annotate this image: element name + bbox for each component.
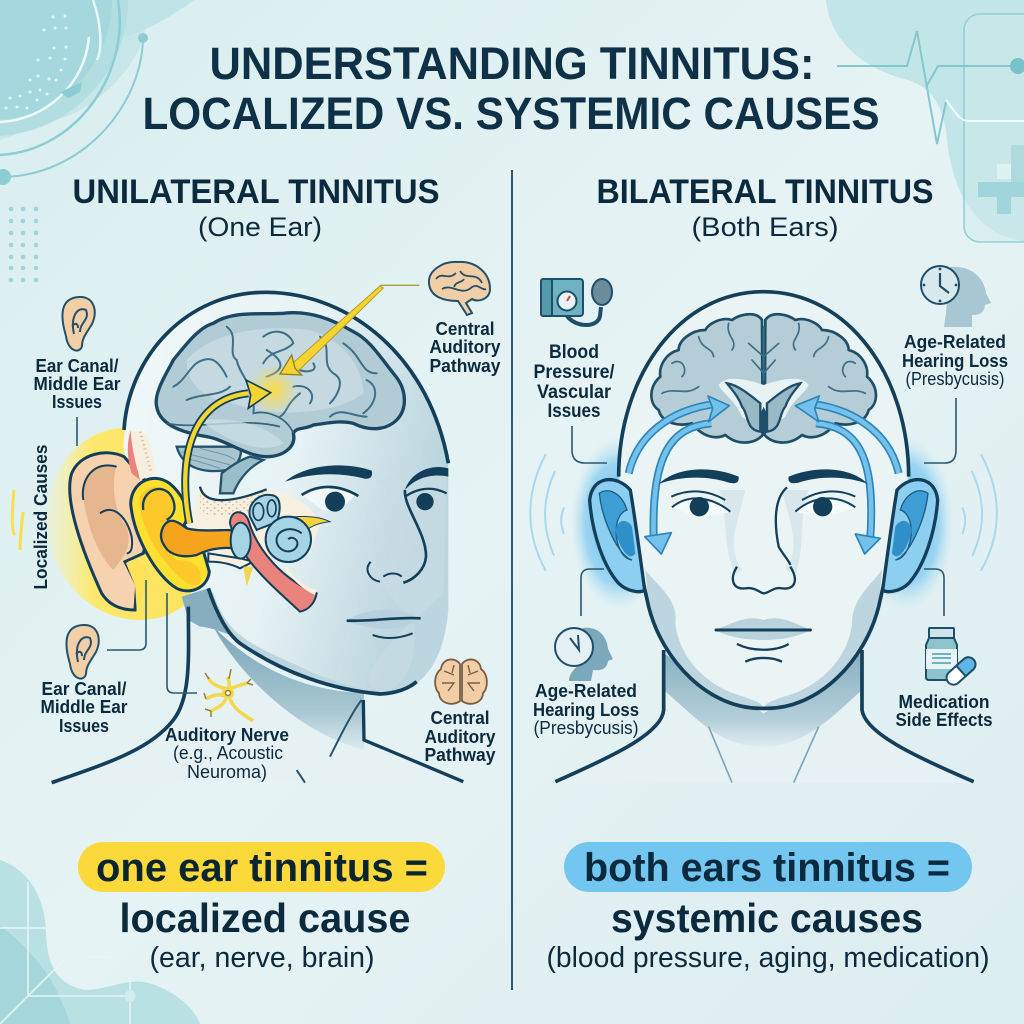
heading: unilateral: UNILATERAL TINNITUS [72,173,440,211]
callout line: auditory nerve [167,593,197,693]
sound waves [530,455,997,570]
icon: ear top [62,297,95,351]
icon: medicine bottle and capsule [926,628,978,688]
orange ear canal [161,521,233,556]
labels: left panel: Middle Ear [34,373,120,394]
decoration: bottom-left blobs [0,860,200,1024]
labels: right panel: Hearing Loss [533,699,639,720]
labels: right panel: Hearing Loss [902,350,1008,371]
icon: brain side [429,262,490,315]
blue pill [564,842,972,892]
labels: left panel: Issues [52,391,102,412]
blue arrows [629,396,899,554]
cross section: skull bone layer [128,430,320,587]
labels: left panel: Auditory [424,726,496,747]
head [123,292,448,694]
icon: brain top [435,659,487,704]
labels: left panel: Pathway [430,355,501,376]
callout line: age-related top [924,398,956,463]
ears [590,480,938,592]
center divider [511,170,513,990]
brain side view [156,313,404,493]
decoration: top-right ECG and medical panel [826,0,1024,242]
takeaway: one ear: one ear tinnitus = [96,846,428,890]
yellow inner ear [131,478,209,591]
labels: right panel: (Presbycusis) [906,369,1004,389]
heading: bilateral: (Both Ears) [692,212,838,242]
labels: right panel: Age-Related [904,331,1006,352]
labels: left panel: (e.g., Acoustic [173,743,283,763]
takeaway: both ears: systemic causes [611,895,923,941]
takeaway: one ear: localized cause [120,895,410,941]
labels: right panel: Issues [548,400,601,422]
labels: right panel: Age-Related [535,680,637,701]
heading: unilateral: (One Ear) [198,212,322,242]
blue glows [570,437,954,610]
title: LOCALIZED VS. SYSTEMIC CAUSES [142,88,880,139]
icon: neuron [204,669,253,721]
callout line: ear canal bottom [107,580,146,650]
decoration: top-left circles [0,0,194,185]
cochlea and canals [231,495,311,562]
takeaway: one ear [78,842,445,974]
ear outer peach [70,453,157,610]
yellow arrow from ear to brain [185,380,271,523]
takeaway: both ears [546,842,990,974]
labels: left panel: Neuroma) [187,762,267,782]
labels: left panel: Middle Ear [40,696,128,717]
icon: blood pressure cuff [541,279,612,325]
right panel: bilateral head illustration [530,292,997,783]
middle ear tube [230,512,317,612]
heading: unilateral [72,173,440,242]
labels: left panel: Pathway [424,744,496,765]
callout line: medication [924,569,944,616]
labels: left panel [34,318,501,782]
labels: right panel: Vascular [537,381,611,403]
labels: right panel: Medication [898,691,990,712]
heading: bilateral [596,173,934,242]
brain front view [651,314,876,443]
yellow arrow from brain icon [280,285,419,375]
labels: right panel: Blood [549,341,599,363]
icon: ear bottom [66,625,99,679]
labels: left panel: Ear Canal/ [36,355,118,376]
icon: clock head top [921,266,991,327]
yellow tick marks [12,490,23,550]
takeaway: both ears: both ears tinnitus = [584,846,950,890]
callout line: ear canal top [76,417,78,446]
labels: left panel: Central [430,707,490,728]
labels: left panel: Central [436,318,494,339]
labels: left panel: Issues [59,715,109,736]
labels: left panel: Auditory Nerve [165,724,289,745]
yellow pill [78,842,445,892]
yellow glow [47,428,200,620]
heading: bilateral: BILATERAL TINNITUS [596,173,934,211]
callout line: blood pressure [572,426,607,463]
callout line: age-related bottom [581,569,604,616]
title: UNDERSTANDING TINNITUS: [210,38,814,89]
labels: right panel: Side Effects [896,709,992,730]
title [142,38,880,139]
takeaway: both ears: (blood pressure, aging, medication) [546,942,990,974]
icon: clock head bottom [555,628,613,681]
label: localized causes: Localized Causes [30,444,51,590]
labels: right panel [533,331,1008,738]
neck [52,588,463,783]
neck [555,650,974,783]
labels: left panel: Auditory [430,336,501,357]
decoration: dot grid [9,207,38,282]
head [619,292,909,708]
facial features [659,469,868,662]
takeaway: one ear: (ear, nerve, brain) [150,942,374,974]
left panel: unilateral head illustration [47,285,463,783]
facial features [285,465,448,638]
auditory nerve branch [277,516,330,532]
labels: right panel: Pressure/ [534,361,615,383]
labels: right panel: (Presbycusis) [534,718,638,738]
labels: left panel: Ear Canal/ [42,678,126,699]
